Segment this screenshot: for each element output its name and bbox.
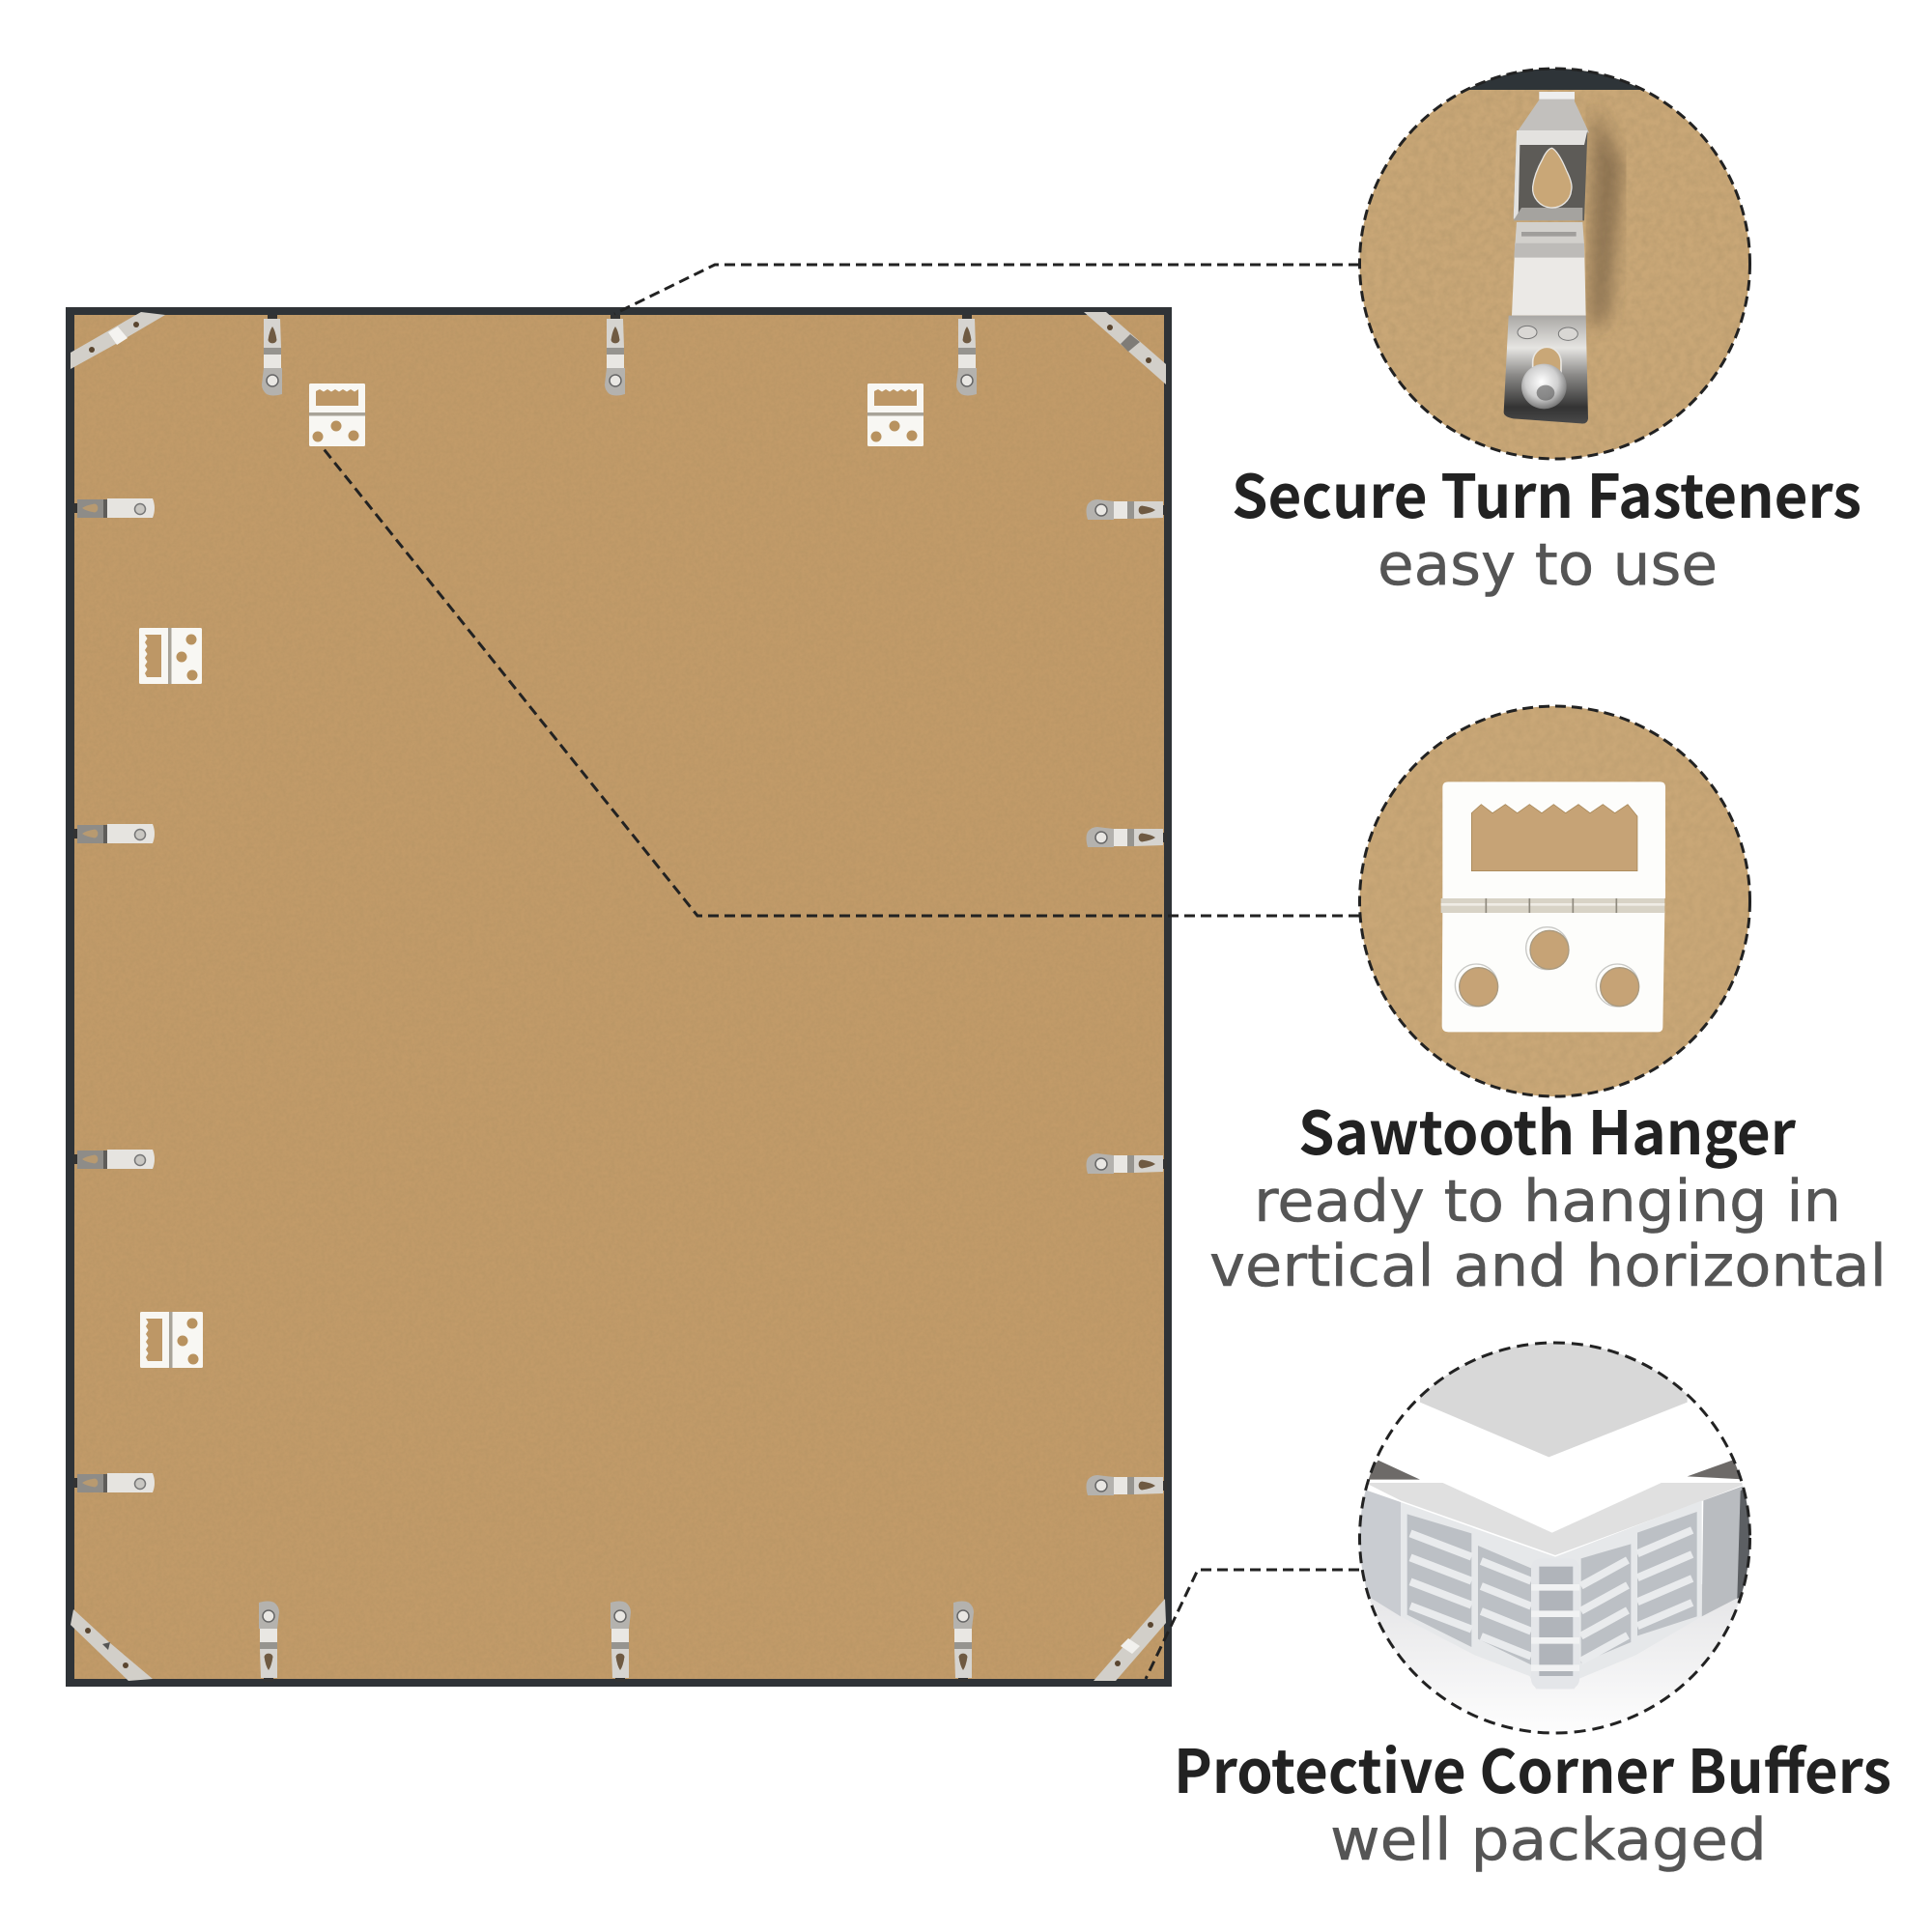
centre column — [1531, 1679, 1579, 1687]
picture frame back panel — [66, 307, 1172, 1687]
subheading: well packaged — [1330, 1806, 1767, 1874]
leader line: fasteners — [614, 265, 1359, 314]
callout circle: turn fastener close-up — [1352, 63, 1758, 469]
subheading: easy to use — [1378, 531, 1718, 599]
hardboard backing — [74, 315, 1164, 1679]
subheading line 2: vertical and horizontal — [1209, 1233, 1887, 1300]
sawtooth hangers — [139, 384, 923, 1368]
frame border — [66, 307, 1172, 1687]
heading: Sawtooth Hanger — [1298, 1085, 1797, 1172]
subheading line 1: ready to hanging in — [1254, 1168, 1841, 1236]
top mat — [1420, 1333, 1688, 1457]
callout circle: sawtooth hanger close-up — [1352, 700, 1758, 1106]
callout circle: corner buffer close-up — [1352, 1333, 1758, 1744]
leader line: sawtooth hanger — [321, 445, 1359, 916]
dashed ring — [1360, 1343, 1750, 1733]
ribs — [1410, 1530, 1692, 1662]
dashed ring — [1360, 706, 1750, 1096]
heading: Secure Turn Fasteners — [1232, 448, 1861, 535]
caption: sawtooth hanger — [1209, 1085, 1887, 1300]
dashed ring — [1360, 69, 1750, 459]
heading: Protective Corner Buffers — [1174, 1723, 1891, 1810]
windows — [1407, 1514, 1471, 1647]
corner brackets — [71, 312, 1166, 1681]
caption: protective corner buffers — [1174, 1723, 1891, 1874]
leader line: corner buffers — [1146, 1570, 1359, 1679]
turn fasteners — [73, 315, 1167, 1682]
caption: secure turn fasteners — [1232, 448, 1861, 599]
